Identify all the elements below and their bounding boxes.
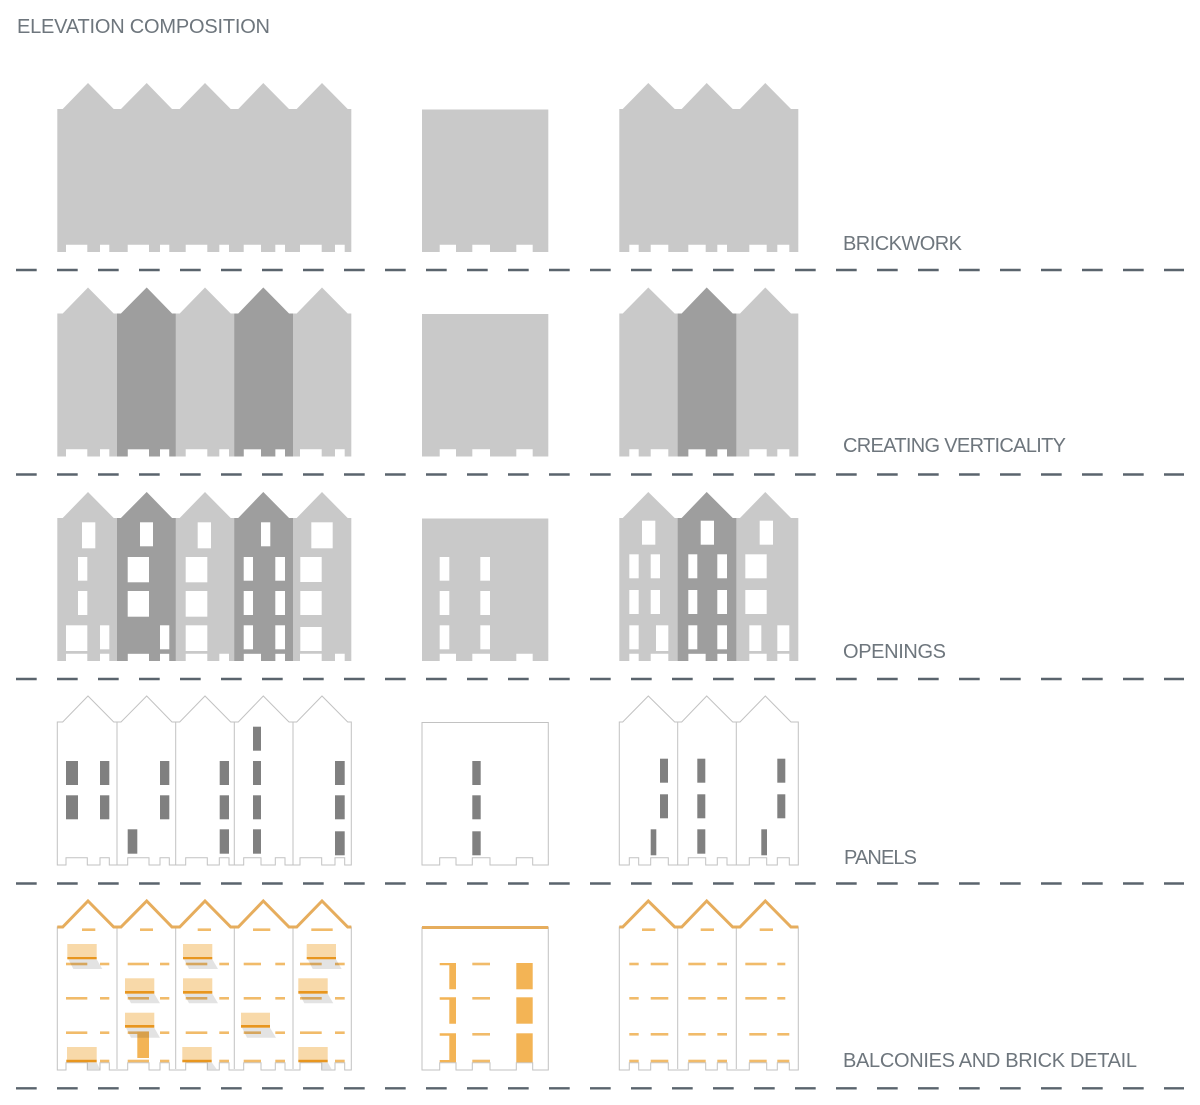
building: flat-roof block silhouette xyxy=(422,110,548,252)
building: flat-roof outline with panels xyxy=(422,722,548,865)
balcony shadows xyxy=(68,959,342,1069)
building: five houses with window openings xyxy=(57,489,351,664)
building: flat-roof block with brick detail xyxy=(422,926,548,1070)
building: five houses with balconies and brick detail xyxy=(57,901,351,1070)
building: three houses with darker centre xyxy=(619,284,798,460)
row: brickwork xyxy=(57,83,963,255)
building: three house outlines with panels xyxy=(619,696,798,865)
row: openings xyxy=(57,489,946,664)
label: creating verticality: CREATING VERTICALITY xyxy=(843,435,1066,457)
label: balconies and brick detail: BALCONIES AND BRICK DETAIL xyxy=(843,1050,1137,1072)
title: ELEVATION COMPOSITION xyxy=(17,16,270,38)
building: five houses silhouette xyxy=(57,83,351,252)
door xyxy=(137,1032,149,1058)
row: balconies and brick detail xyxy=(57,901,1137,1072)
row: panels xyxy=(57,696,917,869)
building: flat-roof block with window openings xyxy=(422,518,548,661)
building: three houses silhouette xyxy=(619,83,798,252)
balconies xyxy=(66,944,336,1062)
building: five house outlines with panels xyxy=(57,696,351,865)
roof brick detail xyxy=(57,901,351,927)
building: five houses with alternating tones xyxy=(57,284,351,460)
label: brickwork: BRICKWORK xyxy=(843,233,963,255)
brick courses xyxy=(66,928,345,1062)
row: creating verticality xyxy=(57,284,1066,460)
label: openings: OPENINGS xyxy=(843,641,946,663)
building: three houses with brick detail xyxy=(619,901,798,1070)
building: three houses with window openings xyxy=(619,489,798,664)
building: flat-roof block xyxy=(422,314,548,456)
label: panels: PANELS xyxy=(844,847,917,869)
